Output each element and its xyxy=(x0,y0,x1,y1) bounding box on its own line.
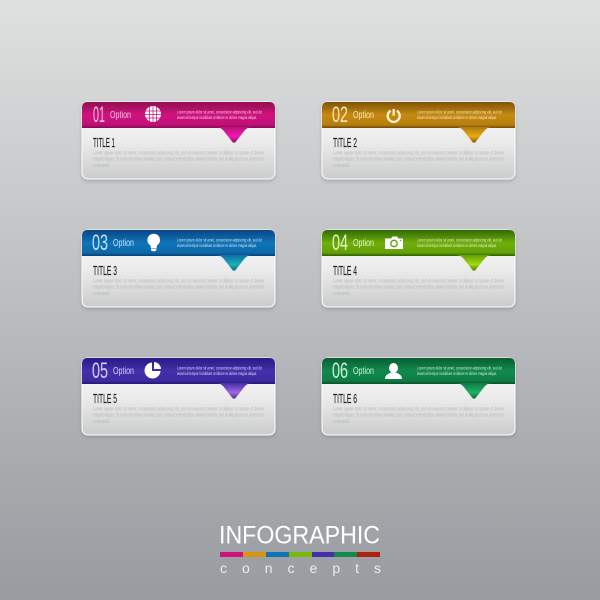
number 05: 05 xyxy=(92,358,108,383)
body text: magna aliqua. Ut enim ad minim veniam, quis nostrud exercitation ullamco laboris nisi ut aliquip ex ea commodo xyxy=(333,412,504,418)
body text: Lorem ipsum dolor sit amet, consectetur adipiscing elit, sed do eiusmod tempor incididunt ut labore et dolore xyxy=(93,150,264,156)
body text: consequat. xyxy=(93,419,110,425)
header text: eiusmod tempor incididunt ut labore et dolore magna aliqua. xyxy=(417,243,497,248)
body text: magna aliqua. Ut enim ad minim veniam, quis nostrud exercitation ullamco laboris nisi ut aliquip ex ea commodo xyxy=(333,156,504,162)
colour bar xyxy=(220,552,380,557)
body text xyxy=(93,150,264,169)
icon: power xyxy=(388,109,400,122)
header text: eiusmod tempor incididunt ut labore et dolore magna aliqua. xyxy=(417,371,497,376)
title: TITLE 6 xyxy=(333,392,357,406)
header text: eiusmod tempor incididunt ut labore et dolore magna aliqua. xyxy=(177,371,257,376)
header text: Lorem ipsum dolor sit amet, consectetur adipiscing elit, sed do xyxy=(177,366,262,370)
body text: consequat. xyxy=(333,291,350,297)
header text: Lorem ipsum dolor sit amet, consectetur adipiscing elit, sed do xyxy=(417,238,502,242)
header text: Lorem ipsum dolor sit amet, consectetur adipiscing elit, sed do xyxy=(417,366,502,370)
number 02: 02 xyxy=(332,102,348,127)
panel: card 6 xyxy=(322,358,515,437)
icon: pie chart xyxy=(145,362,161,378)
panel: card 4 xyxy=(322,230,515,309)
title: TITLE 2 xyxy=(333,136,357,150)
number 06: 06 xyxy=(332,358,348,383)
header text: Lorem ipsum dolor sit amet, consectetur adipiscing elit, sed do xyxy=(177,110,262,114)
option label: Option xyxy=(353,366,374,377)
header text xyxy=(177,366,262,376)
header text xyxy=(417,238,502,248)
number 03: 03 xyxy=(92,230,108,255)
body text: consequat. xyxy=(333,419,350,425)
body text: Lorem ipsum dolor sit amet, consectetur adipiscing elit, sed do eiusmod tempor incididunt ut labore et dolore xyxy=(333,278,504,284)
body text: consequat. xyxy=(93,163,110,169)
body text: consequat. xyxy=(333,163,350,169)
icon: person xyxy=(385,363,402,379)
panel: card 5 xyxy=(82,358,275,437)
body text: magna aliqua. Ut enim ad minim veniam, quis nostrud exercitation ullamco laboris nisi ut aliquip ex ea commodo xyxy=(93,412,264,418)
panel: card 1 xyxy=(82,102,275,181)
body text: consequat. xyxy=(93,291,110,297)
title: TITLE 4 xyxy=(333,264,357,278)
panel: card 1: TITLE 1 xyxy=(93,136,115,150)
body text: Lorem ipsum dolor sit amet, consectetur adipiscing elit, sed do eiusmod tempor incididunt ut labore et dolore xyxy=(333,406,504,412)
header text xyxy=(417,366,502,376)
body text: Lorem ipsum dolor sit amet, consectetur adipiscing elit, sed do eiusmod tempor incididunt ut labore et dolore xyxy=(93,278,264,284)
body text: magna aliqua. Ut enim ad minim veniam, quis nostrud exercitation ullamco laboris nisi ut aliquip ex ea commodo xyxy=(333,284,504,290)
heading: INFOGRAPHIC: INFOGRAPHIC xyxy=(219,522,380,550)
body text xyxy=(333,406,504,425)
header text: Lorem ipsum dolor sit amet, consectetur adipiscing elit, sed do xyxy=(417,110,502,114)
header text xyxy=(177,110,262,120)
panel: card 2 xyxy=(322,102,515,181)
body text xyxy=(93,278,264,297)
option label: Option xyxy=(113,366,134,377)
option label: Option xyxy=(353,238,374,249)
body text: Lorem ipsum dolor sit amet, consectetur adipiscing elit, sed do eiusmod tempor incididunt ut labore et dolore xyxy=(333,150,504,156)
subheading: concepts: concepts xyxy=(220,560,381,576)
body text xyxy=(93,406,264,425)
icon: camera xyxy=(385,236,403,249)
panel: card 3 xyxy=(82,230,275,309)
header text: eiusmod tempor incididunt ut labore et dolore magna aliqua. xyxy=(177,115,257,120)
header text: Lorem ipsum dolor sit amet, consectetur adipiscing elit, sed do xyxy=(177,238,262,242)
header text xyxy=(177,238,262,248)
number 04: 04 xyxy=(332,230,348,255)
title: TITLE 5 xyxy=(93,392,117,406)
panel: card 1: 01 xyxy=(93,102,105,127)
header text: eiusmod tempor incididunt ut labore et dolore magna aliqua. xyxy=(417,115,497,120)
body text: Lorem ipsum dolor sit amet, consectetur adipiscing elit, sed do eiusmod tempor incididunt ut labore et dolore xyxy=(93,406,264,412)
body text xyxy=(333,150,504,169)
header text: eiusmod tempor incididunt ut labore et dolore magna aliqua. xyxy=(177,243,257,248)
option label: Option xyxy=(110,110,131,121)
body text: magna aliqua. Ut enim ad minim veniam, quis nostrud exercitation ullamco laboris nisi ut aliquip ex ea commodo xyxy=(93,284,264,290)
icon: globe xyxy=(145,106,161,122)
option label: Option xyxy=(353,110,374,121)
body text: magna aliqua. Ut enim ad minim veniam, quis nostrud exercitation ullamco laboris nisi ut aliquip ex ea commodo xyxy=(93,156,264,162)
option label: Option xyxy=(113,238,134,249)
body text xyxy=(333,278,504,297)
header text xyxy=(417,110,502,120)
icon: light bulb xyxy=(147,234,160,251)
title: TITLE 3 xyxy=(93,264,117,278)
